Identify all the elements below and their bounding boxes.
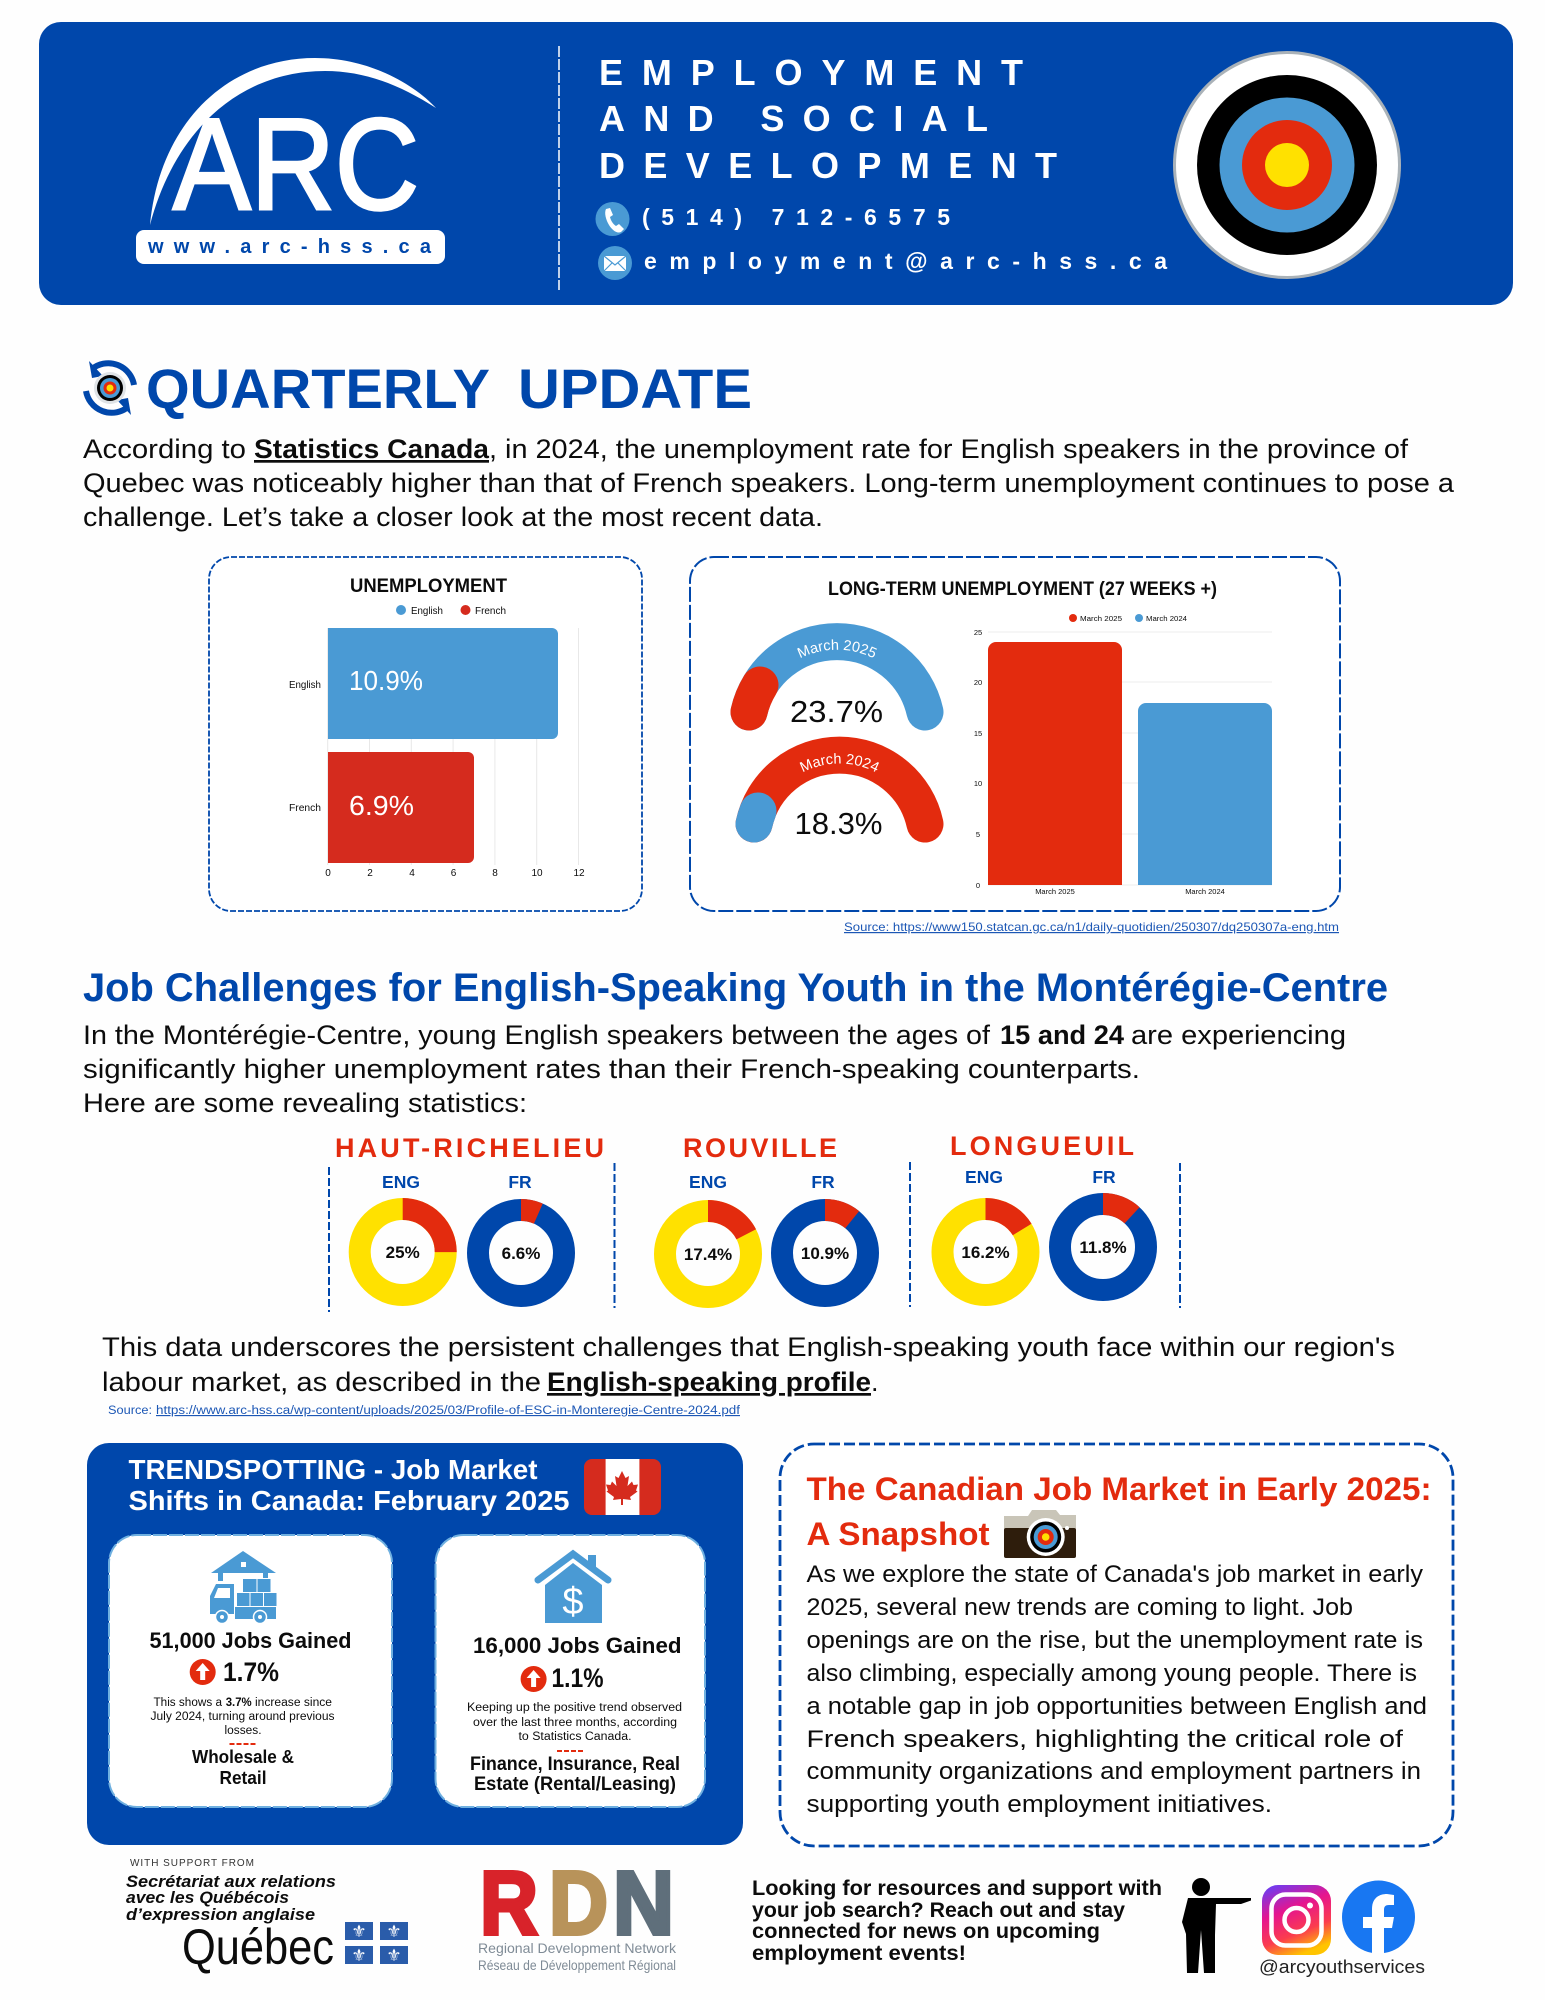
bar: March 2025 xyxy=(988,642,1122,885)
chart title: LONG-TERM UNEMPLOYMENT (27 WEEKS +) xyxy=(828,579,1217,600)
source link: Source: xyxy=(108,1405,152,1417)
donut: ENG 16.2%: 16.2% xyxy=(961,1243,1010,1262)
panel title xyxy=(128,1454,570,1516)
donut: FR 11.8%: 11.8% xyxy=(1079,1238,1127,1257)
call to action text: your job search? Reach out and stay xyxy=(752,1899,1125,1922)
panel: long-term unemployment xyxy=(689,556,1341,912)
region: Haut-Richelieu: HAUT-RICHELIEU xyxy=(335,1133,604,1163)
region: Longueuil: LONGUEUIL xyxy=(950,1131,1134,1161)
donut: FR 6.6%: 6.6% xyxy=(502,1244,540,1263)
legend: March 2024 xyxy=(1146,614,1187,623)
logo: Quebec secretariat: ⚜ xyxy=(351,1946,367,1966)
call to action text: connected for news on upcoming xyxy=(752,1920,1100,1943)
title: employment and social development: AND SOCIAL xyxy=(599,98,988,139)
icon: Instagram xyxy=(1262,1885,1331,1955)
bar: English 10.9%: 10.9% xyxy=(349,665,423,696)
axis labels: 6 xyxy=(451,868,457,879)
heading: quarterly update: QUARTERLY xyxy=(146,357,490,420)
logo: Quebec secretariat: ⚜ xyxy=(386,1922,402,1942)
body text: community organizations and employment partners in xyxy=(806,1758,1421,1785)
card: wholesale and retail xyxy=(109,1535,392,1807)
region: Haut-Richelieu xyxy=(335,1133,604,1296)
paragraph: youth unemployment: significantly higher unemployment rates than their French-speaking counterparts. xyxy=(83,1054,1140,1084)
icon: house with dollar sign xyxy=(538,1554,608,1623)
email address: employment@arc-hss.ca xyxy=(644,248,1167,274)
region: Longueuil: FR xyxy=(1092,1167,1116,1187)
stat: 51,000 jobs gained: 51,000 Jobs Gained xyxy=(150,1628,352,1653)
description: increase since xyxy=(255,1697,332,1709)
legend: English xyxy=(411,605,443,617)
heading: quarterly update: UPDATE xyxy=(518,357,752,420)
heading: job challenges: Job Challenges for English-Speaking Youth in the Montérégie-Centre xyxy=(83,966,1388,1010)
panel: Canadian job market snapshot xyxy=(780,1444,1453,1846)
call to action text xyxy=(752,1877,1162,1965)
description: 3.7% xyxy=(226,1697,252,1709)
icon: mail xyxy=(598,246,632,280)
support label: WITH SUPPORT FROM xyxy=(130,1858,254,1869)
logo: Regional Development Network xyxy=(478,1854,677,1973)
logo: Regional Development Network: D xyxy=(549,1854,608,1954)
panel: header banner xyxy=(39,22,1513,305)
bar: French 6.9%: 6.9% xyxy=(349,790,414,821)
logo: Quebec secretariat: avec les Québécois xyxy=(126,1889,289,1907)
call to action text: employment events! xyxy=(752,1942,966,1965)
axis labels: 0 xyxy=(976,881,980,890)
paragraph: persistent challenges: English-speaking profile xyxy=(547,1367,871,1397)
intro paragraph: challenge. Let’s take a closer look at the most recent data. xyxy=(83,502,823,532)
axis labels: English xyxy=(289,680,321,691)
website pill: www.arc-hss.ca xyxy=(147,236,432,258)
gauge: March 2024: 18.3% xyxy=(794,806,882,841)
axis labels xyxy=(974,628,1225,896)
donut: FR 6.6% xyxy=(478,1210,564,1296)
axis labels: 10 xyxy=(531,868,543,879)
icon: up arrow xyxy=(521,1666,547,1692)
panel: trendspotting xyxy=(87,1443,743,1845)
logo: Regional Development Network: Réseau de Développement Régional xyxy=(478,1957,676,1973)
description: This shows a xyxy=(154,1697,223,1709)
social handle: @arcyouthservices xyxy=(1259,1957,1425,1977)
icon: target xyxy=(1173,51,1401,279)
sector label xyxy=(192,1747,294,1788)
legend xyxy=(1069,614,1187,623)
logo: Quebec secretariat: ⚜ xyxy=(351,1922,367,1942)
description: over the last three months, according xyxy=(473,1717,677,1729)
axis labels: 12 xyxy=(573,868,585,879)
sector label: Retail xyxy=(220,1768,266,1788)
icon: delivery truck and warehouse xyxy=(210,1551,276,1624)
sector label: Estate (Rental/Leasing) xyxy=(474,1774,676,1795)
gauge: March 2024 xyxy=(736,736,944,842)
paragraph: persistent challenges xyxy=(102,1332,1395,1397)
card: finance, insurance, real estate xyxy=(436,1535,705,1807)
intro paragraph: Quebec was noticeably higher than that of French speakers. Long-term unemployment continues to pose a xyxy=(83,468,1455,498)
body text: openings are on the rise, but the unemployment rate is xyxy=(806,1627,1423,1654)
paragraph: persistent challenges: labour market, as described in the xyxy=(102,1367,541,1397)
website pill xyxy=(136,230,445,264)
axis labels: 10 xyxy=(974,779,982,788)
sector label: Finance, Insurance, Real xyxy=(470,1754,680,1775)
donut: ENG 16.2% xyxy=(942,1209,1028,1295)
description: July 2024, turning around previous xyxy=(150,1711,335,1723)
intro paragraph xyxy=(83,434,1455,532)
title: employment and social development xyxy=(599,52,1057,186)
icon: up arrow xyxy=(190,1659,216,1685)
region: Rouville xyxy=(665,1133,868,1297)
panel title: The Canadian Job Market in Early 2025: xyxy=(806,1471,1432,1507)
panel title: TRENDSPOTTING - Job Market xyxy=(128,1454,538,1485)
paragraph: youth unemployment: In the Montérégie-Centre, young English speakers between the ages of xyxy=(83,1020,991,1050)
description: losses. xyxy=(224,1725,262,1737)
intro paragraph: According to xyxy=(83,434,246,464)
region: Rouville: ROUVILLE xyxy=(683,1133,837,1163)
donut: FR 10.9% xyxy=(782,1210,868,1296)
legend: French xyxy=(475,605,506,617)
logo: Quebec secretariat: d’expression anglaise xyxy=(126,1906,315,1924)
logo: Regional Development Network: R xyxy=(480,1854,538,1954)
logo: Regional Development Network: Regional Development Network xyxy=(478,1940,677,1956)
region: Rouville: ENG xyxy=(689,1172,727,1192)
paragraph: youth unemployment: Here are some revealing statistics: xyxy=(83,1088,527,1118)
region: Longueuil xyxy=(942,1131,1146,1295)
donut: ENG 25%: 25% xyxy=(386,1243,420,1262)
sector label xyxy=(470,1754,680,1795)
gauge: March 2025: March 2025 xyxy=(797,639,877,658)
description: to Statistics Canada. xyxy=(518,1731,632,1743)
logo: Quebec secretariat: Québec xyxy=(182,1919,334,1975)
logo: Quebec secretariat: Secrétariat aux relations xyxy=(126,1873,336,1891)
body text: a notable gap in job opportunities between English and xyxy=(806,1693,1427,1720)
legend: March 2025 xyxy=(1080,614,1122,623)
gauge: March 2025: 23.7% xyxy=(790,694,883,729)
source link: https://www.arc-hss.ca/wp-content/uploads/2025/03/Profile-of-ESC-in-Monteregie-Centre-2024.pdf xyxy=(156,1405,741,1417)
paragraph: persistent challenges: . xyxy=(871,1367,879,1397)
axis labels: 8 xyxy=(492,868,498,879)
title: employment and social development: DEVELOPMENT xyxy=(599,145,1057,186)
icon: house with dollar sign: $ xyxy=(562,1581,584,1623)
donut: ENG 25% xyxy=(360,1209,446,1295)
panel: unemployment bar chart xyxy=(209,557,642,911)
paragraph: persistent challenges: This data underscores the persistent challenges that English-speaking youth face within our region's xyxy=(102,1332,1395,1362)
region: Haut-Richelieu: ENG xyxy=(382,1172,420,1192)
description xyxy=(467,1702,682,1743)
logo: Quebec secretariat: ⚜ xyxy=(386,1946,402,1966)
body text: French speakers, highlighting the critical role of xyxy=(806,1726,1403,1753)
body text: also climbing, especially among young people. There is xyxy=(806,1660,1417,1687)
axis labels: 5 xyxy=(976,830,980,839)
axis labels xyxy=(289,680,585,879)
stat: 16,000 jobs gained: 16,000 Jobs Gained xyxy=(473,1633,682,1658)
stat: 1.1%: 1.1% xyxy=(552,1663,604,1693)
sector label: Wholesale & xyxy=(192,1747,294,1767)
chart title: UNEMPLOYMENT xyxy=(350,576,507,597)
icon: Canadian flag xyxy=(584,1459,661,1515)
axis labels: 0 xyxy=(325,868,331,879)
bar: French 6.9% xyxy=(328,752,474,863)
axis labels: 2 xyxy=(367,868,373,879)
heading: quarterly update xyxy=(146,357,752,420)
donut: FR 10.9%: 10.9% xyxy=(801,1244,849,1263)
description: Keeping up the positive trend observed xyxy=(467,1702,682,1714)
paragraph: youth unemployment: are experiencing xyxy=(1131,1020,1346,1050)
call to action text: Looking for resources and support with xyxy=(752,1877,1162,1900)
donut: FR 11.8% xyxy=(1060,1204,1146,1290)
body text: supporting youth employment initiatives. xyxy=(806,1791,1272,1818)
logo: ARC: ARC xyxy=(173,91,419,237)
panel title xyxy=(806,1471,1432,1552)
axis labels: 4 xyxy=(409,868,415,879)
legend xyxy=(396,605,506,617)
stat: 1.7%: 1.7% xyxy=(223,1657,279,1687)
axis labels: March 2025 xyxy=(1035,887,1075,896)
donut: ENG 17.4%: 17.4% xyxy=(684,1245,732,1264)
body text xyxy=(806,1561,1427,1818)
icon: phone xyxy=(596,202,630,236)
icon: person pointing xyxy=(1182,1878,1251,1973)
body text: As we explore the state of Canada's job market in early xyxy=(806,1561,1424,1588)
paragraph: youth unemployment: 15 and 24 xyxy=(1000,1020,1124,1050)
panel title: Shifts in Canada: February 2025 xyxy=(128,1485,570,1516)
icon: camera with target lens xyxy=(1004,1510,1076,1558)
axis labels: 25 xyxy=(974,628,982,637)
logo: Quebec secretariat xyxy=(126,1873,408,1975)
icon: Facebook xyxy=(1342,1880,1415,1954)
intro paragraph: , in 2024, the unemployment rate for English speakers in the province of xyxy=(489,434,1409,464)
intro paragraph: Statistics Canada xyxy=(254,434,490,464)
region: Longueuil: ENG xyxy=(965,1167,1003,1187)
gauge: March 2024: March 2024 xyxy=(800,753,879,772)
axis labels: 15 xyxy=(974,729,982,738)
gauge: March 2025 xyxy=(730,623,944,730)
bar: March 2024 xyxy=(1138,703,1272,885)
description xyxy=(150,1697,335,1737)
axis labels: 20 xyxy=(974,678,982,687)
donut: ENG 17.4% xyxy=(665,1211,751,1297)
body text: 2025, several new trends are coming to light. Job xyxy=(806,1594,1353,1621)
phone number: (514) 712-6575 xyxy=(642,204,950,230)
title: employment and social development: EMPLOYMENT xyxy=(599,52,1023,93)
logo: Regional Development Network: N xyxy=(613,1854,674,1954)
region: Haut-Richelieu: FR xyxy=(508,1172,532,1192)
region: Rouville: FR xyxy=(811,1172,835,1192)
panel title: A Snapshot xyxy=(806,1516,990,1552)
bar: English 10.9% xyxy=(328,628,558,739)
source link: Source: https://www150.statcan.gc.ca/n1/daily-quotidien/250307/dq250307a-eng.htm xyxy=(844,920,1339,934)
icon: target with circular arrows xyxy=(86,361,134,415)
axis labels: March 2024 xyxy=(1185,887,1225,896)
axis labels: French xyxy=(289,803,321,814)
paragraph: youth unemployment xyxy=(83,1020,1346,1118)
